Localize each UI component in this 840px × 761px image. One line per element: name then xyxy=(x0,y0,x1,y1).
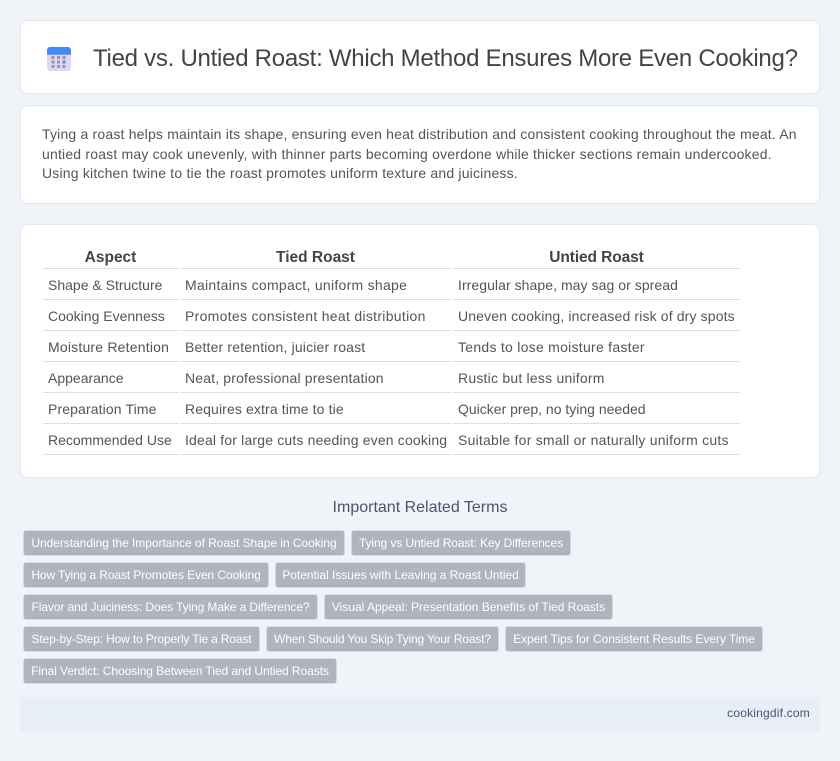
table header xyxy=(85,249,644,266)
header card xyxy=(20,20,820,94)
comparison table: Rustic but less uniform xyxy=(458,370,605,386)
panel: intro text xyxy=(20,105,820,204)
comparison table: Maintains compact, uniform shape xyxy=(185,277,407,293)
related term tags: Potential Issues with Leaving a Roast Untied xyxy=(282,568,519,582)
intro paragraph: untied roast may cook unevenly, with thinner parts becoming overdone while thicker sections remain undercooked. xyxy=(42,146,772,162)
comparison table: Suitable for small or naturally uniform cuts xyxy=(458,432,729,448)
intro paragraph: Using kitchen twine to tie the roast promotes uniform texture and juiciness. xyxy=(42,165,518,181)
comparison table: Quicker prep, no tying needed xyxy=(458,401,646,417)
related term tags: When Should You Skip Tying Your Roast? xyxy=(274,632,491,646)
heading: related terms: Important Related Terms xyxy=(333,499,507,516)
table header: Aspect xyxy=(85,249,136,266)
comparison table xyxy=(43,249,740,455)
panel: comparison table xyxy=(20,224,820,478)
comparison table: Irregular shape, may sag or spread xyxy=(458,277,678,293)
related term tags: Step-by-Step: How to Properly Tie a Roast xyxy=(32,632,251,646)
title: Tied vs. Untied Roast: Which Method Ensures More Even Cooking? xyxy=(93,45,798,72)
related term tags: How Tying a Roast Promotes Even Cooking xyxy=(31,568,261,582)
comparison table: Better retention, juicier roast xyxy=(185,339,365,355)
footer source: cookingdif.com xyxy=(727,706,810,720)
icon: calendar xyxy=(47,47,71,71)
comparison table: Cooking Evenness xyxy=(48,308,165,324)
intro paragraph xyxy=(42,126,797,181)
comparison table: Ideal for large cuts needing even cooking xyxy=(185,432,447,448)
intro paragraph: Tying a roast helps maintain its shape, ensuring even heat distribution and consistent cooking throughout the meat. An xyxy=(42,126,797,142)
related term tags: Final Verdict: Choosing Between Tied and Untied Roasts xyxy=(31,664,329,678)
related term tags: Tying vs Untied Roast: Key Differences xyxy=(359,536,563,550)
comparison table: Uneven cooking, increased risk of dry spots xyxy=(458,308,735,324)
comparison table: Moisture Retention xyxy=(48,339,169,355)
related term tags: Understanding the Importance of Roast Shape in Cooking xyxy=(31,536,337,550)
comparison table: Neat, professional presentation xyxy=(185,370,384,386)
table header: Untied Roast xyxy=(549,249,644,266)
related term tags: Flavor and Juiciness: Does Tying Make a Difference? xyxy=(32,600,309,614)
related term tags xyxy=(23,530,763,684)
comparison table: Requires extra time to tie xyxy=(185,401,344,417)
footer xyxy=(20,697,820,731)
related term tags: Visual Appeal: Presentation Benefits of Tied Roasts xyxy=(332,600,605,614)
comparison table: Promotes consistent heat distribution xyxy=(185,308,426,324)
comparison table: Preparation Time xyxy=(48,401,157,417)
comparison table: Tends to lose moisture faster xyxy=(458,339,645,355)
comparison table: Shape & Structure xyxy=(48,277,162,293)
table header: Tied Roast xyxy=(276,249,355,266)
comparison table: Recommended Use xyxy=(48,432,172,448)
comparison table: Appearance xyxy=(48,370,124,386)
related term tags: Expert Tips for Consistent Results Every Time xyxy=(513,632,755,646)
